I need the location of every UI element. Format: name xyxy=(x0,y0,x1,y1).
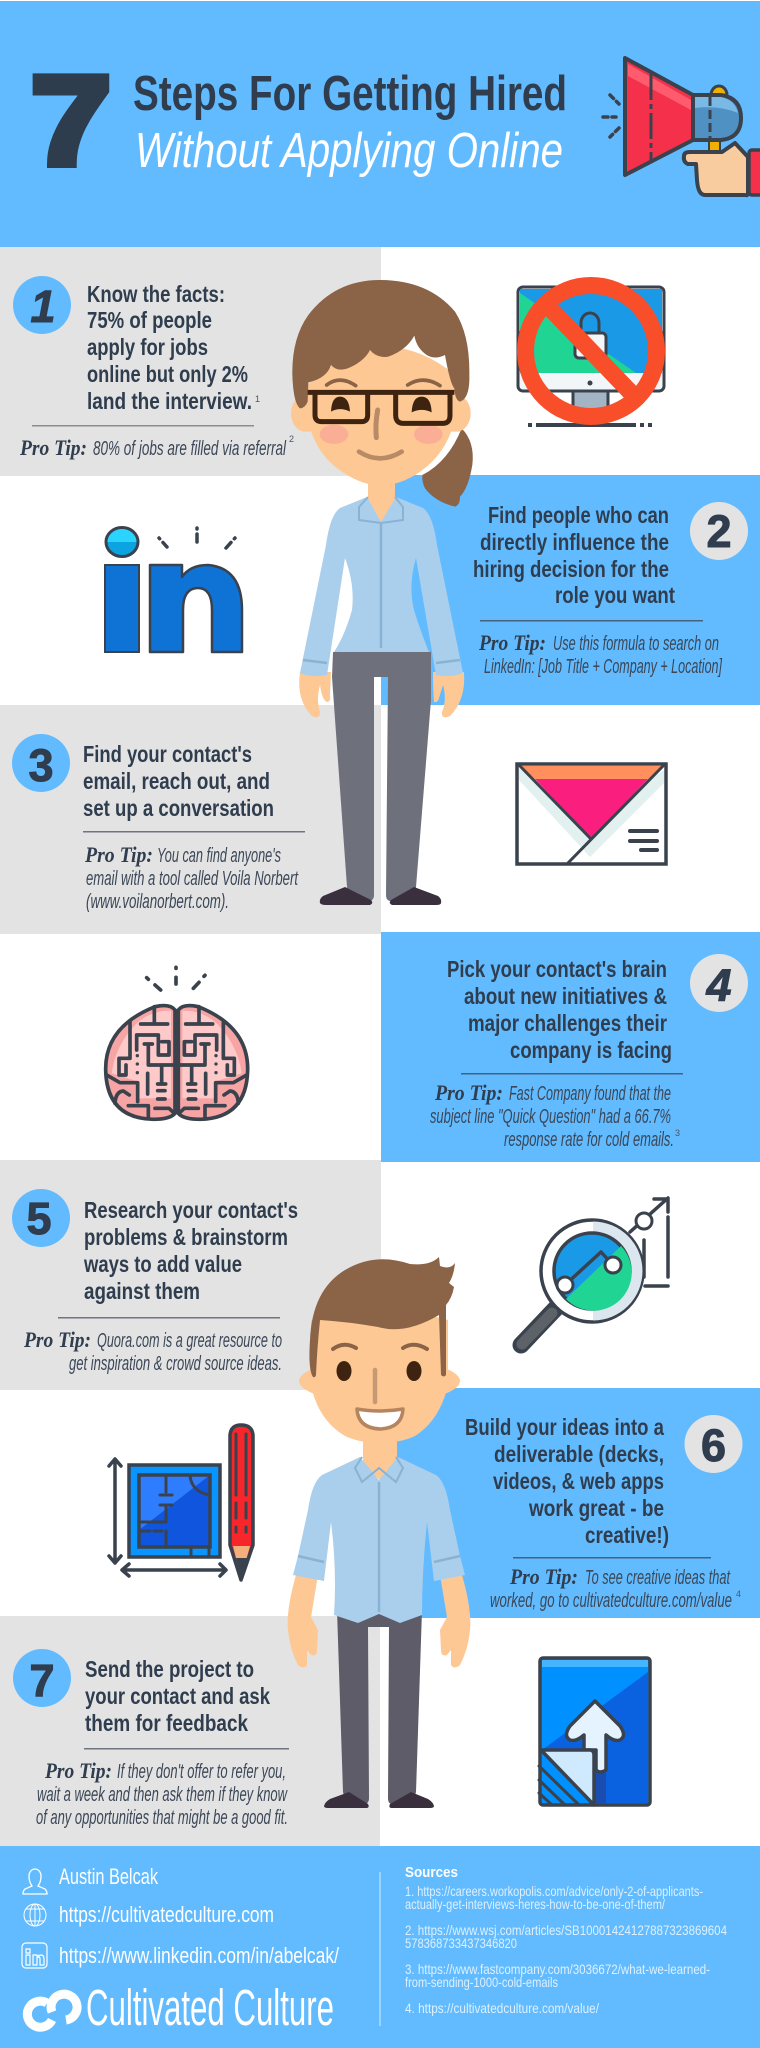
step 1 heading: 1 xyxy=(255,394,260,404)
sources heading: Sources xyxy=(405,1864,458,1881)
icon: megaphone xyxy=(603,58,760,195)
icon: brain xyxy=(106,967,248,1119)
woman: left shoe xyxy=(320,887,372,905)
number 7: 7 xyxy=(29,1655,55,1706)
woman: glasses xyxy=(308,392,454,423)
icon: page with upload arrow xyxy=(539,1658,650,1805)
source 1: actually-get-interviews-heres-how-to-be-one-of-them/ xyxy=(405,1896,665,1912)
step 2 pro tip xyxy=(478,630,722,678)
panel: step 6 xyxy=(465,1414,742,1612)
step 4 heading: Pick your contact's brain xyxy=(447,956,667,982)
sources list xyxy=(405,1864,727,2016)
step 6 heading: work great - be xyxy=(528,1495,664,1521)
number 2: 2 xyxy=(706,506,732,557)
step 6 heading xyxy=(465,1414,669,1548)
step 7 heading xyxy=(85,1656,271,1736)
man: nose xyxy=(373,1370,377,1402)
step 7 heading: Send the project to xyxy=(85,1656,254,1682)
man: neck xyxy=(363,1430,397,1480)
man: eyes xyxy=(336,1361,352,1381)
woman: ponytail xyxy=(422,428,473,507)
step 3 heading: email, reach out, and xyxy=(83,768,270,794)
step 2 heading: role you want xyxy=(555,582,675,608)
panel: step 3 xyxy=(12,734,305,913)
woman: nose xyxy=(376,410,378,438)
man: left arm xyxy=(288,1575,318,1668)
step 4 pro tip: Fast Company found that the xyxy=(509,1083,671,1105)
woman: neck xyxy=(368,470,395,525)
step 5 heading: ways to add value xyxy=(83,1251,242,1277)
step 6 pro tip: 4 xyxy=(736,1589,741,1599)
icon: blueprint and pencil xyxy=(109,1425,253,1580)
logo wordmark: Cultivated Culture xyxy=(86,1979,334,2036)
step 1 pro tip: 80% of jobs are filled via referral xyxy=(93,438,286,460)
step 1 heading: apply for jobs xyxy=(87,334,208,360)
number badge 3 xyxy=(12,734,70,792)
step 3 pro tip: You can find anyone's xyxy=(157,845,281,867)
step 2 pro tip: Pro Tip: xyxy=(478,630,546,655)
step 3 heading: Find your contact's xyxy=(83,741,252,767)
woman: mouth xyxy=(359,452,402,458)
step 4 heading: company is facing xyxy=(510,1037,672,1063)
man: right shoe xyxy=(389,1792,434,1808)
step 5 pro tip: get inspiration & crowd source ideas. xyxy=(69,1353,282,1375)
step 3 pro tip: Pro Tip: xyxy=(84,842,153,867)
woman: head xyxy=(291,280,473,507)
step 2 heading xyxy=(473,502,675,608)
panel background: step 2 xyxy=(381,475,760,705)
step 6 heading: videos, & web apps xyxy=(493,1468,664,1494)
panel: step 5 xyxy=(12,1189,298,1375)
step 5 heading: problems & brainstorm xyxy=(84,1224,288,1250)
step 1 pro tip xyxy=(19,434,294,460)
number badge 5 xyxy=(12,1189,70,1247)
source 3 xyxy=(405,1961,710,1990)
source 2 xyxy=(405,1922,727,1951)
step 1 heading: land the interview. xyxy=(87,388,252,414)
man: eyebrows xyxy=(333,1345,427,1349)
number 6: 6 xyxy=(701,1420,726,1471)
step 4 pro tip xyxy=(430,1080,680,1151)
step 5 heading: Research your contact's xyxy=(84,1197,298,1223)
footer band xyxy=(0,1846,760,2048)
panel background: step 6 xyxy=(381,1388,760,1618)
icon: envelope xyxy=(517,764,666,864)
man: mouth xyxy=(357,1409,403,1429)
illustration: woman figure xyxy=(291,280,473,905)
step 1 heading: online but only 2% xyxy=(87,361,248,387)
man: ears xyxy=(299,1359,460,1403)
step 2 heading: Find people who can xyxy=(488,502,669,528)
number badge 7 xyxy=(13,1649,71,1707)
number 4: 4 xyxy=(705,960,732,1011)
man: hair xyxy=(309,1257,455,1377)
woman: right hand xyxy=(433,672,464,717)
woman: shirt xyxy=(300,497,463,676)
woman: ears xyxy=(291,395,471,432)
woman: face xyxy=(308,347,455,486)
man: right arm xyxy=(440,1575,470,1668)
step 3 heading xyxy=(83,741,274,821)
panel background: step 1 xyxy=(0,247,381,476)
step 1 pro tip: 2 xyxy=(289,434,294,444)
icon: magnifying glass chart xyxy=(521,1198,668,1345)
step 4 pro tip: Pro Tip: xyxy=(434,1080,503,1105)
panel background: step 7 xyxy=(0,1616,380,1846)
panel background: step 4 xyxy=(381,932,760,1162)
footer contact details xyxy=(22,1864,340,1968)
step 5 pro tip: Quora.com is a great resource to xyxy=(97,1330,282,1352)
title line two: Without Applying Online xyxy=(135,124,563,178)
step 3 pro tip xyxy=(84,842,299,913)
woman: eyes xyxy=(331,397,432,412)
step 3 pro tip: (www.voilanorbert.com). xyxy=(86,891,229,913)
step 5 heading: against them xyxy=(84,1278,200,1304)
icon: linkedin xyxy=(105,528,242,652)
woman: cheeks xyxy=(320,425,443,444)
source 2: 578368733437346820 xyxy=(405,1935,517,1951)
step 7 pro tip: If they don't offer to refer you, xyxy=(117,1761,286,1783)
number 1: 1 xyxy=(30,281,56,332)
step 2 heading: hiring decision for the xyxy=(473,556,669,582)
divider xyxy=(380,1872,381,2026)
step 4 heading: about new initiatives & xyxy=(464,983,667,1009)
icon: monitor with no sign xyxy=(518,286,664,425)
brand logo xyxy=(27,1979,334,2036)
woman: right shoe xyxy=(390,887,441,905)
step 7 heading: them for feedback xyxy=(85,1710,249,1736)
header band xyxy=(0,1,760,247)
man: shirt xyxy=(293,1457,465,1623)
source 1 xyxy=(405,1883,703,1912)
woman: eyebrows xyxy=(327,380,440,386)
step 4 pro tip: 3 xyxy=(675,1128,680,1138)
step 1 pro tip: Pro Tip: xyxy=(19,435,87,460)
number badge 2 xyxy=(690,502,748,560)
step 5 heading xyxy=(83,1197,298,1304)
step 7 heading: your contact and ask xyxy=(85,1683,271,1709)
illustration: man figure xyxy=(288,1257,470,1808)
step 7 pro tip: wait a week and then ask them if they know xyxy=(37,1784,288,1806)
icon: linkedin outline xyxy=(22,1943,47,1968)
step 3 heading: set up a conversation xyxy=(83,795,274,821)
number badge 4 xyxy=(690,954,748,1012)
step 6 heading: deliverable (decks, xyxy=(494,1441,664,1467)
author name: Austin Belcak xyxy=(59,1864,159,1889)
panel background: step 3 xyxy=(0,705,381,934)
big seven: 7 xyxy=(31,50,111,191)
number 5: 5 xyxy=(26,1193,52,1244)
step 7 pro tip: of any opportunities that might be a good fit. xyxy=(36,1807,288,1829)
step 1 heading: 75% of people xyxy=(87,307,212,333)
step 4 pro tip: response rate for cold emails. xyxy=(504,1129,674,1151)
man: face xyxy=(311,1310,448,1443)
source 4: 4. https://cultivatedculture.com/value/ xyxy=(405,2000,599,2016)
logo mark xyxy=(27,1994,77,2027)
step 5 pro tip xyxy=(23,1327,282,1375)
step 1 heading: Know the facts: xyxy=(87,281,225,307)
step 6 pro tip xyxy=(490,1564,741,1612)
step 3 pro tip: email with a tool called Voila Norbert xyxy=(86,868,299,890)
step 7 pro tip: Pro Tip: xyxy=(44,1758,112,1783)
step 4 heading xyxy=(447,956,672,1063)
man: pants xyxy=(337,1610,422,1804)
man: left shoe xyxy=(324,1792,369,1808)
icon: globe xyxy=(24,1904,46,1926)
icon: person xyxy=(23,1869,47,1894)
panel background: step 5 xyxy=(0,1160,381,1390)
website link: https://cultivatedculture.com xyxy=(59,1902,274,1927)
panel: step 7 xyxy=(13,1649,289,1829)
step 5 pro tip: Pro Tip: xyxy=(23,1327,91,1352)
panel: step 2 xyxy=(473,502,748,678)
number 3: 3 xyxy=(28,740,54,791)
woman: pants xyxy=(332,652,431,901)
step 6 heading: creative!) xyxy=(585,1522,669,1548)
panel: step 4 xyxy=(430,954,748,1151)
step 7 pro tip xyxy=(36,1758,288,1829)
step 6 heading: Build your ideas into a xyxy=(465,1414,665,1440)
title line one: Steps For Getting Hired xyxy=(133,67,567,121)
panel: step 1 xyxy=(13,276,294,460)
number badge 1 xyxy=(13,276,71,334)
step 6 pro tip: Pro Tip: xyxy=(509,1564,578,1589)
step 2 heading: directly influence the xyxy=(480,529,669,555)
title xyxy=(31,50,567,191)
step 1 heading xyxy=(87,281,260,414)
woman: hair xyxy=(292,280,469,408)
number badge 6 xyxy=(684,1415,742,1473)
woman: left hand xyxy=(299,672,331,717)
source 3: from-sending-1000-cold-emails xyxy=(405,1974,558,1990)
linkedin link: https://www.linkedin.com/in/abelcak/ xyxy=(59,1943,340,1968)
step 4 heading: major challenges their xyxy=(468,1010,667,1036)
